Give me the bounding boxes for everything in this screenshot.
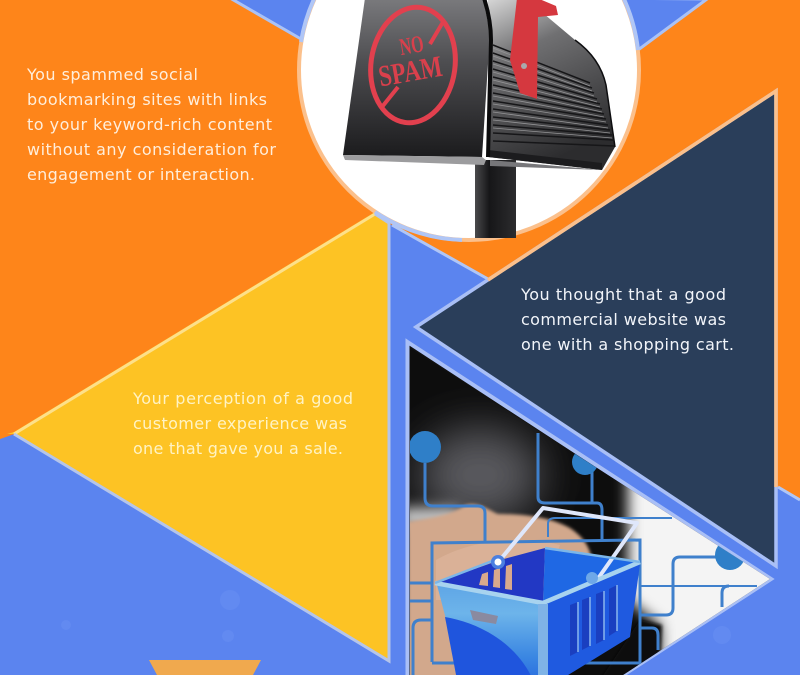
text: social bookmarking: [26, 65, 276, 184]
no spam sign: SPAM: [376, 50, 445, 93]
bottom orange trapezoid: [149, 660, 261, 675]
text: shopping cart: one with a shopping cart.: [521, 335, 734, 354]
basket front panel: [437, 585, 543, 675]
text: social bookmarking: to your keyword-rich content: [27, 115, 272, 134]
grey sheen behind the hand: [418, 427, 542, 523]
basket interior: [435, 548, 545, 603]
blue corner triangle, top right: [600, 0, 707, 50]
circuit lines: [410, 433, 757, 675]
panel: basket photo triangle: [400, 340, 790, 675]
basket side panel: [541, 564, 640, 675]
text: shopping cart: commercial website was: [521, 310, 726, 329]
text: customer experience: one that gave you a sale.: [133, 439, 343, 458]
mailbox ridges: [493, 45, 614, 146]
no spam sign: [363, 2, 463, 128]
mailbox side: [488, 0, 615, 170]
text: customer experience: [132, 389, 353, 458]
mailbox flag: [510, 0, 558, 99]
blue panel edge lines: [392, 225, 800, 500]
text: social bookmarking: without any consideration for: [27, 140, 276, 159]
text: social bookmarking: bookmarking sites with links: [27, 90, 267, 109]
no spam sign: NO: [398, 31, 426, 61]
text: customer experience: customer experience was: [133, 414, 347, 433]
photo backdrop: [571, 451, 770, 675]
text: customer experience: Your perception of a good: [132, 389, 353, 408]
mailbox post: [475, 160, 516, 238]
text: social bookmarking: engagement or interaction.: [27, 165, 255, 184]
mailbox ledge: [343, 155, 486, 165]
icon: shopping basket: [435, 508, 640, 675]
panel: navy triangle: [416, 91, 776, 566]
dark shadow at right of basket: [623, 619, 664, 675]
circle: mailbox photo: [299, 0, 639, 240]
basket rim: [435, 562, 640, 603]
circuit nodes: [409, 431, 441, 463]
front grip: [470, 610, 498, 624]
text: social bookmarking: You spammed social: [26, 65, 198, 84]
background: blue panel: [0, 218, 800, 675]
basket handle: [500, 508, 637, 580]
left handle mount: [491, 555, 505, 569]
mailbox front: [343, 0, 490, 157]
side slots: [570, 585, 617, 656]
text: shopping cart: You thought that a good: [520, 285, 726, 304]
soft background dots: [61, 590, 731, 644]
panel: yellow triangle: [0, 212, 389, 661]
text: shopping cart: [520, 285, 734, 354]
hand: [408, 504, 592, 675]
blue corner triangle, top left: [230, 0, 325, 39]
right handle mount: [586, 572, 598, 584]
white sleeve area: [410, 480, 770, 654]
